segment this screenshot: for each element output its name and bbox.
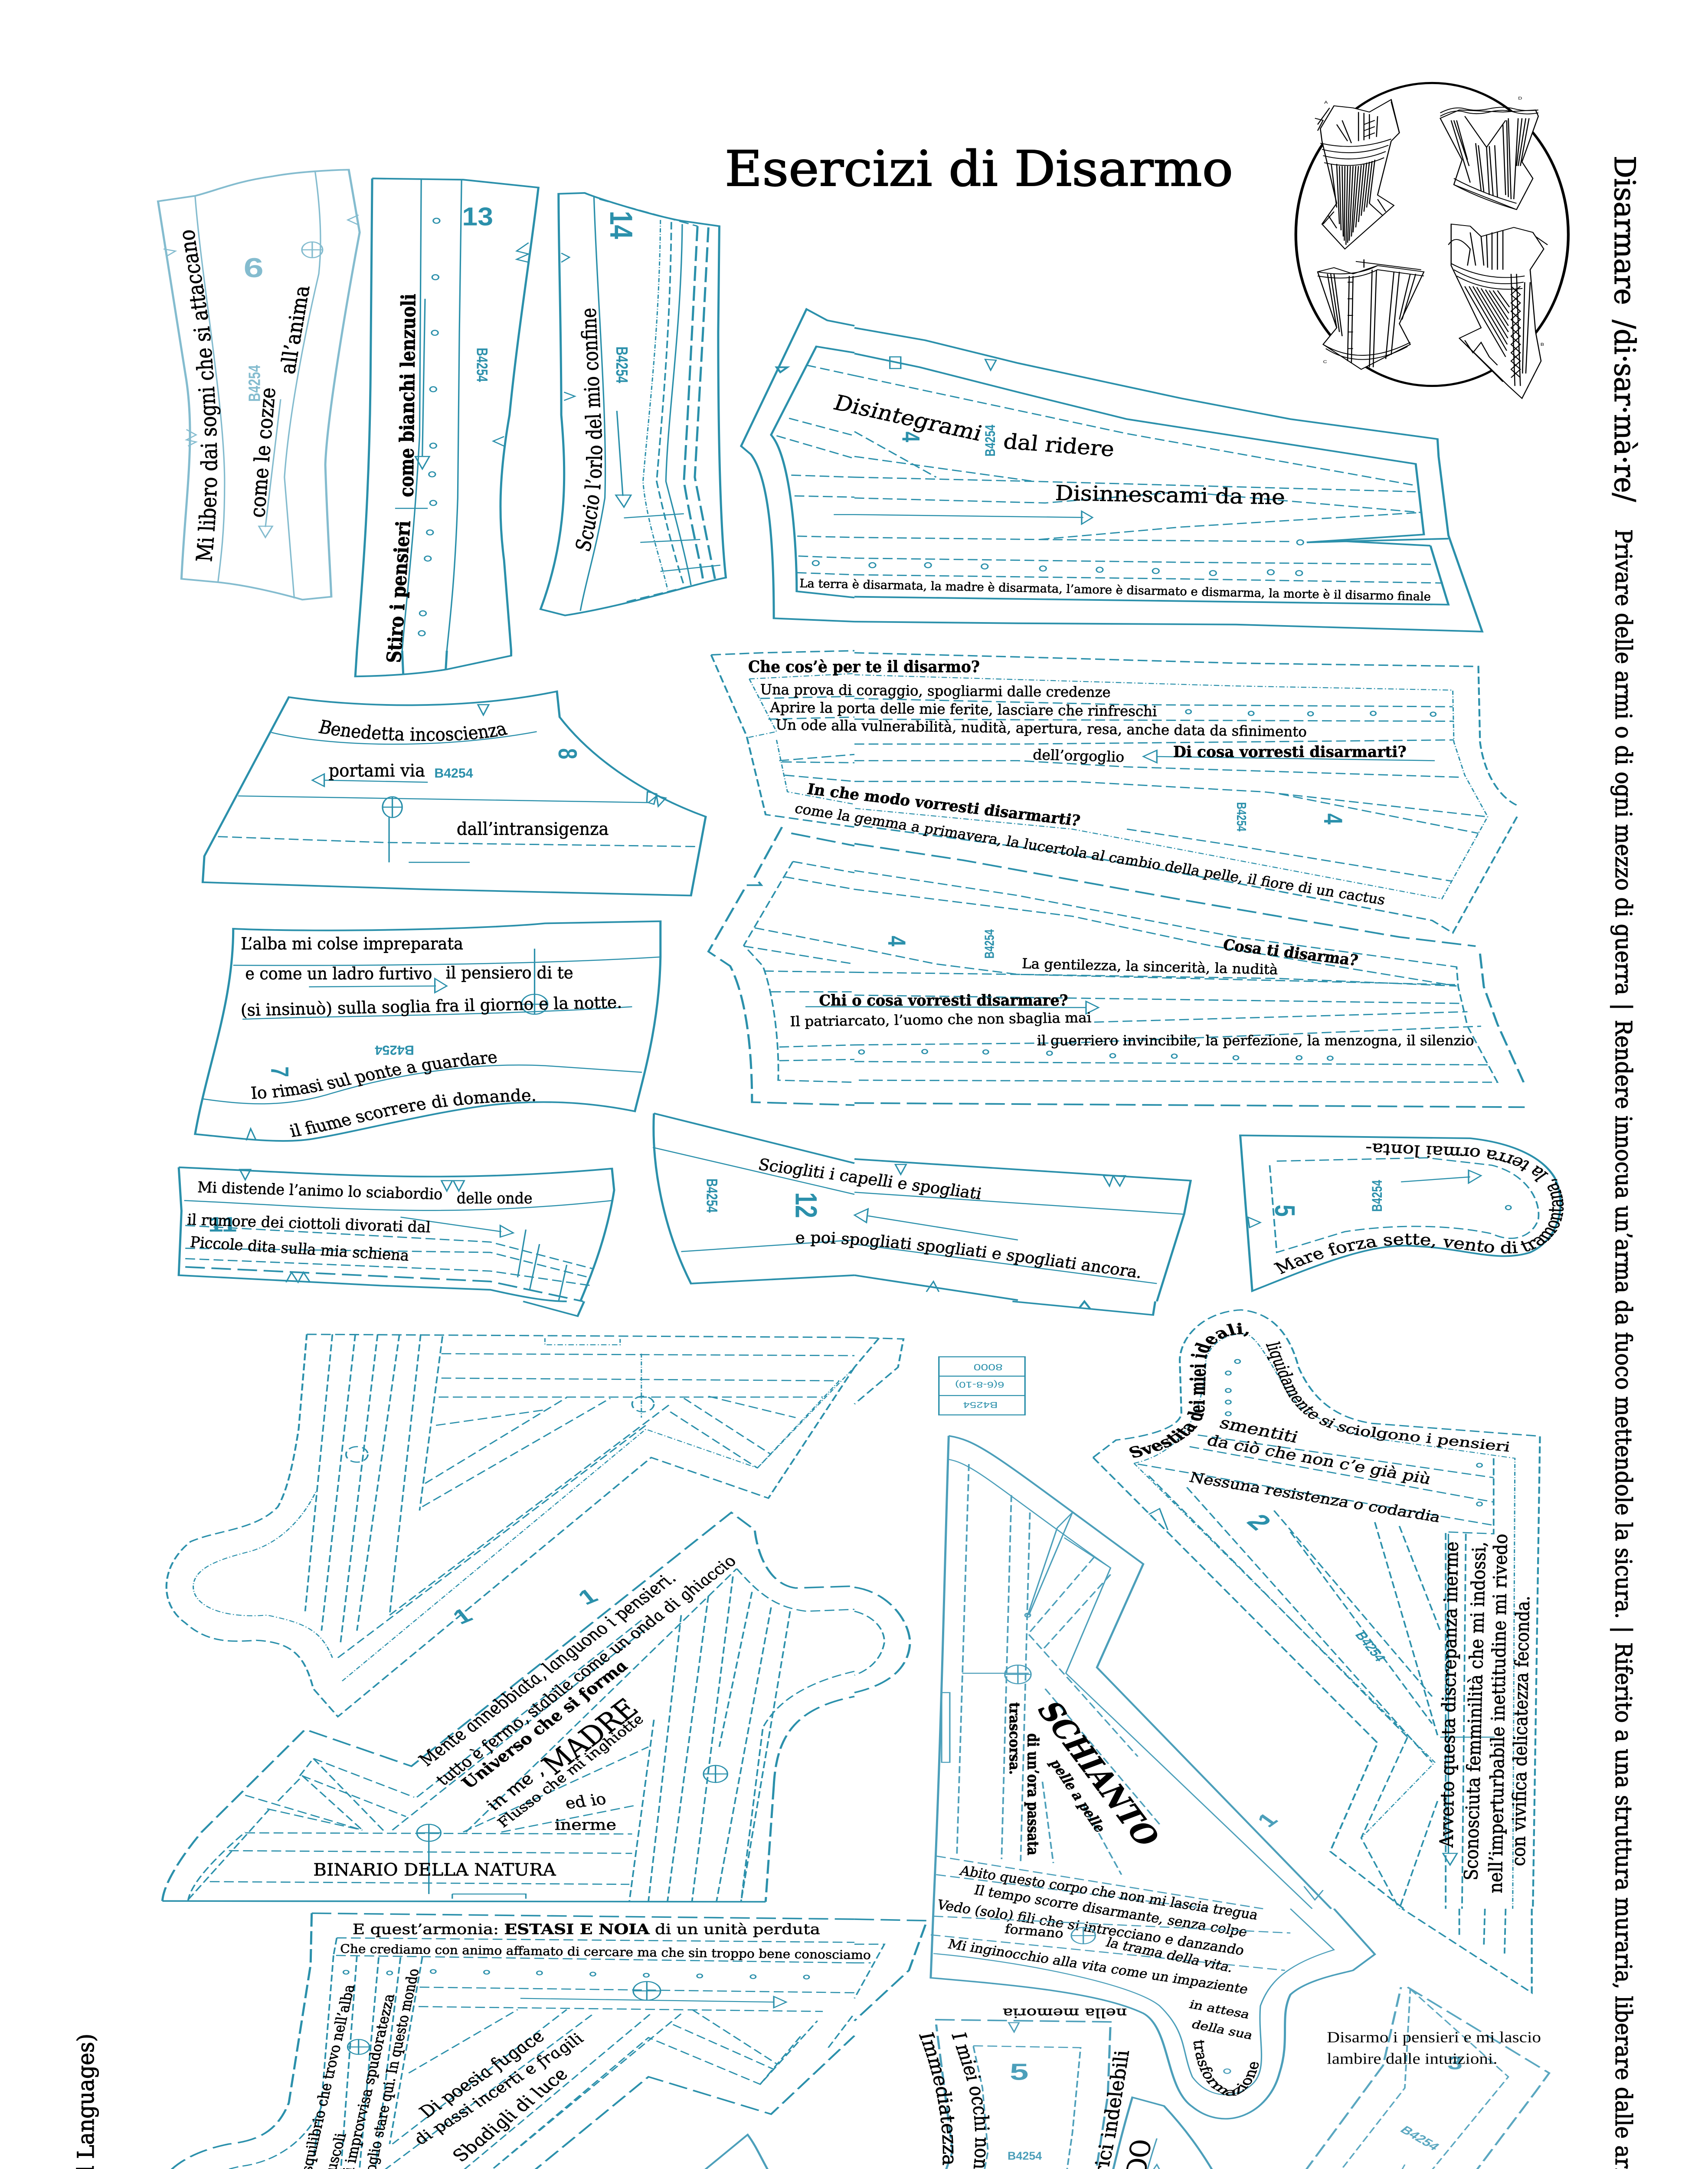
verse: formano [1004, 1921, 1065, 1941]
piece number: 5 [1010, 2059, 1028, 2085]
verse: il fiume scorrere di domande. [288, 1086, 537, 1141]
verse: Il tempo scorre disarmante, senza colpe [972, 1882, 1250, 1940]
piece number: 6 [244, 252, 264, 283]
right side definition text [1608, 156, 1641, 2169]
pattern code: B4254 [1370, 1180, 1385, 1212]
panel: pattern piece 5 U shape [914, 2006, 1134, 2169]
panel: pattern piece 13 [355, 178, 538, 676]
upper part [933, 1436, 1331, 1958]
panel: pattern piece 2 svestita [1093, 1310, 1540, 1993]
piece 11 end [523, 1301, 584, 1316]
verse: pelle a pelle [1046, 1758, 1109, 1834]
headword: Disarmare [1608, 156, 1641, 305]
corset A [1315, 100, 1399, 249]
panel: pattern piece 8 [203, 691, 706, 895]
verse: Stiro i pensieri [383, 520, 415, 663]
verse: Disintegrami [830, 390, 985, 446]
right part [748, 653, 1517, 933]
panel: pattern piece 7 [195, 921, 661, 1141]
corset C [1318, 259, 1424, 369]
icon: corset oval illustration [1296, 83, 1568, 398]
piece 12 right [756, 1156, 1191, 1301]
question: Di cosa vorresti disarmarti? [1173, 743, 1407, 760]
verse: Mi libero dai sogni che si attaccano [174, 229, 222, 563]
verse: delle onde [457, 1190, 533, 1207]
upper part [1093, 1310, 1540, 1909]
corset D [1440, 107, 1538, 210]
verse: Avverto questa discrepanza inerme [1436, 1541, 1463, 1848]
corset letters [1323, 96, 1544, 364]
verse: in me , [481, 1763, 549, 1813]
piece number: 1 [1252, 1809, 1283, 1831]
answer: Aprire la porta delle mie ferite, lasciare che rinfreschi [769, 699, 1157, 720]
piece number: 11 [208, 1213, 237, 1236]
verse: come bianchi lenzuoli [395, 294, 420, 497]
heading: BINARIO DELLA NATURA [313, 1860, 556, 1880]
question: In che modo vorresti disarmarti? [806, 780, 1082, 830]
corset letters: B [1541, 342, 1544, 347]
verse: (si insinuò) sulla soglia fra il giorno e la notte. [240, 993, 622, 1020]
separator: | [1610, 1003, 1636, 1011]
panel: pattern piece 6 light [158, 170, 360, 600]
panel: pattern piece 4 top [741, 309, 1482, 632]
panel: pattern piece 4 middle dashed [711, 651, 1517, 933]
answer: Il patriarcato, l’uomo che non sbaglia mai [790, 1009, 1092, 1029]
panel: pattern piece 11 [179, 1167, 614, 1316]
verse: e come un ladro furtivo [245, 964, 432, 983]
panel: pattern piece 5 top right [1240, 1135, 1569, 1291]
verse: E quest’armonia: ESTASI E NOIA di un unità perduta [353, 1921, 820, 1938]
panel: pattern piece 6 mi arrendo [1089, 2097, 1271, 2169]
lower piece main [162, 1513, 854, 1902]
verse: Scucio l’orlo del mio confine [571, 308, 607, 553]
heading: Che cos’è per te il disarmo? [748, 658, 980, 676]
definition: privare: Privare delle armi o di ogni mezzo di guerra [1610, 529, 1636, 995]
verse: Io rimasi sul ponte a guardare [250, 1047, 499, 1103]
piece number: 7 [266, 1067, 294, 1077]
panel: pattern piece 1 lower dashed [162, 1513, 910, 1902]
panel: pattern piece 14 [540, 193, 726, 616]
verse: e poi spogliati spogliati e spogliati ancora. [795, 1229, 1144, 1282]
separator: | [1610, 1626, 1636, 1634]
left part [708, 827, 854, 1105]
answer: Una prova di coraggio, spogliarmi dalle credenze [760, 681, 1111, 701]
curved verse: Mare forza sette, vento di tramontana, la terra ormai lonta- [1271, 1139, 1569, 1278]
verse: Mi inginocchio alla vita come un impaziente [946, 1936, 1250, 1997]
verse: Sciogliti i capelli e spogliati [756, 1156, 983, 1203]
corset B [1448, 224, 1548, 398]
upper piece main [167, 1334, 854, 1717]
verse: dal ridere [1002, 429, 1116, 462]
verse: Disarmo i pensieri e mi lascio [1327, 2028, 1541, 2046]
pattern code: B4254 [473, 348, 491, 382]
lower part [931, 1909, 1375, 2119]
answer: La gentilezza, la sincerità, la nudità [1021, 956, 1278, 978]
question: Cosa ti disarma? [1221, 936, 1360, 970]
verse: tutto è fermo, stabile come un onda di ghiaccio [431, 1553, 741, 1788]
verse: smentiti [1217, 1414, 1301, 1446]
panel: pattern piece 1 schianto [931, 1436, 1375, 2119]
piece number: 4 [897, 432, 925, 442]
definition: rendere: Rendere innocua un’arma da fuoco mettendole la sicura. [1610, 1020, 1636, 1619]
piece number: 2 [1241, 1510, 1278, 1534]
verse: Vedo (solo) fili che si intrecciano e danzando [935, 1897, 1246, 1958]
verse: lambire dalle intuizioni. [1327, 2050, 1498, 2067]
curved verse: liquidamente si sciolgono i pensieri [1262, 1340, 1512, 1455]
pronunciation: /di·sar·mà·re/ [1608, 320, 1641, 502]
pattern code: B4254 [1008, 2149, 1042, 2162]
verse: Abito questo corpo che non mi lascia tregua [958, 1863, 1260, 1923]
piece number: 14 [603, 211, 639, 239]
verse: Flusso che mi inghiotte [493, 1713, 648, 1830]
verse upside down: nella memoria [1003, 2006, 1127, 2021]
panel: pattern piece 2 solid [153, 2135, 923, 2169]
panel: pattern piece 2 armonia dashed [155, 1913, 927, 2169]
verse: Universo che si forma [457, 1658, 633, 1791]
panel: pattern piece 4 lower dashed [708, 827, 1525, 1107]
pattern code: B4254 [434, 766, 473, 781]
piece number: 4 [883, 936, 911, 947]
left part [711, 651, 854, 827]
lower part [1402, 1909, 1532, 1993]
panel: pattern piece 3 disarmo [1279, 1987, 1549, 2169]
pattern code: B4254 [1351, 1630, 1389, 1664]
piece 12 left [653, 1114, 854, 1284]
verse: Sconosciuta femminilità che mi indossi, [1460, 1541, 1490, 1881]
answer: dell’orgoglio [1032, 747, 1125, 765]
verse: nell’imperturbabile inettitudine mi rivedo [1485, 1533, 1512, 1893]
pattern code: B4254 [983, 425, 998, 456]
pattern code: B4254 [1234, 802, 1249, 832]
verse: di passi incerti e fragili [409, 2031, 589, 2147]
piece number: 12 [789, 1192, 823, 1218]
verse: il rumore dei ciottoli divorati dal [187, 1211, 431, 1236]
verse: il pensiero di te [446, 963, 573, 983]
verse: come le cozze [246, 387, 281, 518]
corset letters: D [1518, 96, 1522, 101]
piece number: 4 [1319, 813, 1348, 825]
verse: La terra è disarmata, la madre è disarmata, l’amore è disarmato e dismarma, la morte è il disarmo finale [799, 577, 1431, 603]
code: B4254 [963, 1400, 998, 1409]
pattern code: B4254 [1397, 2124, 1442, 2153]
lower piece tip [854, 1587, 910, 1693]
piece number: 1 [448, 1604, 478, 1629]
verse: trascorsa. [1006, 1702, 1023, 1775]
panel: pattern piece 1 upper dashed [167, 1334, 903, 1717]
verse: Che crediamo con animo affamato di cercare ma che sin troppo bene conosciamo [340, 1942, 871, 1962]
verse: Nessuna resistenza o codardia [1188, 1469, 1443, 1526]
answer: Un ode alla vulnerabilità, nudità, apertura, resa, anche data da sfinimento [775, 717, 1307, 740]
title: Esercizi di Disarmo [725, 141, 1233, 197]
heading: SCHIANTO [1029, 1697, 1168, 1850]
size range: 6(6-8-10) [955, 1380, 1005, 1389]
right end [854, 1919, 927, 2021]
panel: pattern piece 12 [653, 1114, 1191, 1315]
verse: Benedetta incoscienza [316, 716, 510, 745]
verse: la trama della vita. [1104, 1935, 1236, 1975]
verse: Sbadigli di luce [447, 2066, 574, 2164]
verse: Mi distende l’animo lo sciabordio [197, 1179, 443, 1203]
verse: MADRE [532, 1694, 647, 1779]
piece 11 main [179, 1167, 614, 1301]
piece number: 8 [553, 748, 582, 759]
panel: size table [939, 1357, 1025, 1415]
upper piece end [854, 1337, 903, 1404]
piece 12 bottom [1012, 1301, 1155, 1315]
left part of piece 4 [741, 309, 854, 622]
verse: dall’intransigenza [457, 819, 609, 839]
verse: L’alba mi colse impreparata [241, 934, 463, 953]
corset letters: A [1324, 100, 1328, 105]
verse: con vivifica delicatezza feconda. [1508, 1596, 1534, 1866]
answer: il guerriero invincibile, la perfezione, la menzogna, il silenzio [1037, 1033, 1474, 1048]
verse: portami via [329, 760, 425, 781]
right part [790, 844, 1525, 1107]
piece number: 1 [573, 1585, 603, 1609]
piece 13 upper part [357, 178, 538, 663]
piece number: 5 [1269, 1205, 1300, 1217]
verse: Mente annebbiata, languono i pensieri. [413, 1570, 681, 1769]
size label: 8000 [974, 1362, 1003, 1373]
upper part [185, 2135, 854, 2169]
main part [155, 1913, 871, 2169]
corset letters: C [1323, 360, 1327, 364]
verse: della sua [1190, 2018, 1255, 2042]
verse: ed io [563, 1790, 608, 1813]
pattern code: B4254 [246, 365, 264, 402]
pattern code: B4254 [612, 347, 631, 383]
answer: come la gemma a primavera, la lucertola al cambio della pelle, il fiore di un cactus [793, 800, 1387, 908]
curved verse bold: Svestita dei miei ideali, [1126, 1320, 1253, 1461]
arrow [259, 399, 281, 537]
question: Chi o cosa vorresti disarmare? [819, 992, 1068, 1009]
pattern code: B4254 [703, 1179, 720, 1213]
verse: Piccole dita sulla mia schiena [189, 1234, 410, 1265]
verse: Di poesia fugace [414, 2028, 550, 2121]
verse: Disinnescami da me [1055, 481, 1286, 510]
verse: all’anima [276, 285, 315, 375]
verse: di un’ora passata [1024, 1733, 1042, 1855]
piece number: 3 [1447, 2053, 1463, 2074]
verse: inerme [555, 1816, 616, 1833]
verse: in attesa [1188, 1998, 1252, 2022]
curved verse: trasformazione [1189, 2039, 1263, 2099]
verse: da ciò che non c’e già più [1205, 1432, 1433, 1488]
right part of piece 4 [799, 328, 1482, 632]
piece 13 lower part [355, 651, 511, 676]
pattern code: B4254 [982, 929, 997, 959]
pattern code: B4254 [375, 1043, 414, 1058]
piece number: 13 [462, 202, 493, 231]
